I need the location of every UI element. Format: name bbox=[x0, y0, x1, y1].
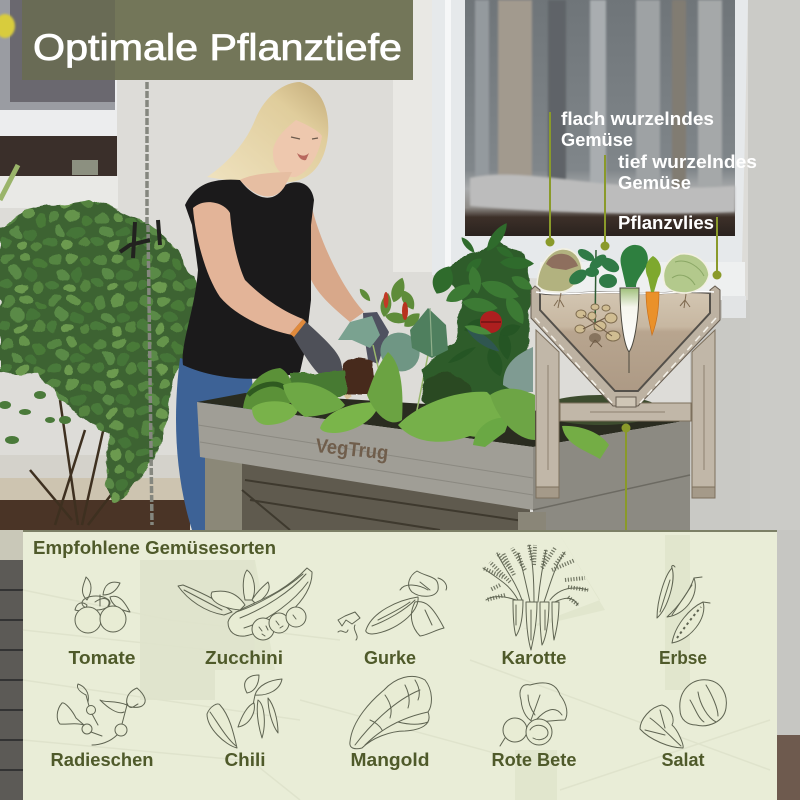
label: flach wurzelndes Gemüse bbox=[561, 109, 714, 150]
photo: chain bbox=[120, 82, 160, 525]
veg: right lettuce bbox=[663, 254, 709, 308]
icon: zucchini bbox=[178, 568, 312, 640]
diagram: planter cross-section bbox=[531, 245, 720, 498]
icon: cucumber bbox=[338, 571, 447, 640]
photo: ground and mulch bbox=[0, 478, 800, 800]
callout: fleece line bbox=[712, 217, 722, 280]
callout: planter pointer line bbox=[622, 424, 630, 532]
label: Chili: Chili bbox=[224, 750, 266, 770]
icon: lettuces bbox=[640, 680, 726, 748]
photo: woman bbox=[176, 82, 389, 530]
label: flach wurzelndes Gemüse: flach wurzelndes bbox=[561, 109, 714, 129]
label: flach wurzelndes Gemüse: Gemüse bbox=[561, 130, 633, 150]
photo: right window with curtains bbox=[432, 0, 748, 318]
photo background: house wall bbox=[0, 0, 800, 540]
jeans bbox=[176, 358, 262, 530]
icon: pea pods bbox=[657, 565, 710, 643]
icon: carrots bbox=[483, 545, 588, 650]
legs and crossbar bbox=[536, 330, 715, 498]
photo: lettuce leaves over box bbox=[243, 352, 609, 459]
herbs bbox=[421, 372, 469, 414]
dense foliage mass bbox=[420, 240, 532, 395]
red lettuce bbox=[342, 358, 376, 395]
icon: radishes bbox=[57, 684, 145, 745]
label: Pflanzvlies: Pflanzvlies bbox=[618, 213, 714, 233]
red pepper bbox=[480, 311, 502, 333]
gloves bbox=[291, 319, 343, 392]
kale leaves bbox=[372, 325, 428, 379]
photo: dark plants behind lettuce bbox=[290, 220, 660, 425]
veg: left lettuce bbox=[537, 249, 582, 308]
brand mark: VegTrug bbox=[314, 435, 389, 465]
hair bbox=[207, 82, 328, 183]
title text: Optimale Pflanztiefe bbox=[33, 27, 402, 68]
label: tief wurzelndes Gemüse bbox=[618, 152, 757, 193]
neck and chest bbox=[240, 172, 292, 196]
label: Radieschen: Radieschen bbox=[50, 750, 154, 770]
clamp bbox=[616, 397, 636, 407]
trough walls bbox=[531, 286, 720, 406]
label: Karotte: Karotte bbox=[502, 648, 566, 668]
callout: shallow roots line bbox=[546, 112, 554, 246]
veg: carrot bbox=[646, 256, 661, 335]
near arm bbox=[193, 202, 303, 335]
black top bbox=[183, 180, 314, 379]
label: Tomate: Tomate bbox=[68, 648, 136, 668]
icon: chard bbox=[350, 676, 431, 749]
label: tief wurzelndes Gemüse: Gemüse bbox=[618, 173, 691, 193]
far arm bbox=[307, 208, 364, 322]
photo: left window bbox=[0, 0, 118, 208]
panel heading: Empfohlene Gemüsesorten bbox=[33, 538, 276, 558]
label: Salat: Salat bbox=[662, 750, 704, 770]
face bbox=[273, 120, 322, 177]
icon: tomato bbox=[75, 577, 130, 633]
icon: beetroots bbox=[500, 683, 567, 746]
icon: chili peppers bbox=[207, 675, 282, 748]
soil bbox=[540, 292, 710, 391]
label: tief wurzelndes Gemüse: tief wurzelndes bbox=[618, 152, 757, 172]
label: Rote Bete: Rote Bete bbox=[492, 750, 576, 770]
label: Gurke: Gurke bbox=[364, 648, 416, 668]
callout: deep roots line bbox=[600, 155, 610, 250]
photo: hedge bbox=[0, 200, 197, 525]
label: Erbse: Erbse bbox=[659, 648, 707, 668]
title banner bbox=[22, 0, 413, 80]
veg: potato plant bbox=[566, 247, 622, 347]
photo: planter interior bbox=[197, 393, 690, 447]
label: Zucchini: Zucchini bbox=[205, 648, 283, 668]
panel: recommended vegetables bbox=[23, 530, 777, 800]
label: Mangold: Mangold bbox=[350, 750, 430, 770]
veg: white radish bbox=[620, 245, 648, 373]
photo: planter box bbox=[197, 402, 690, 530]
